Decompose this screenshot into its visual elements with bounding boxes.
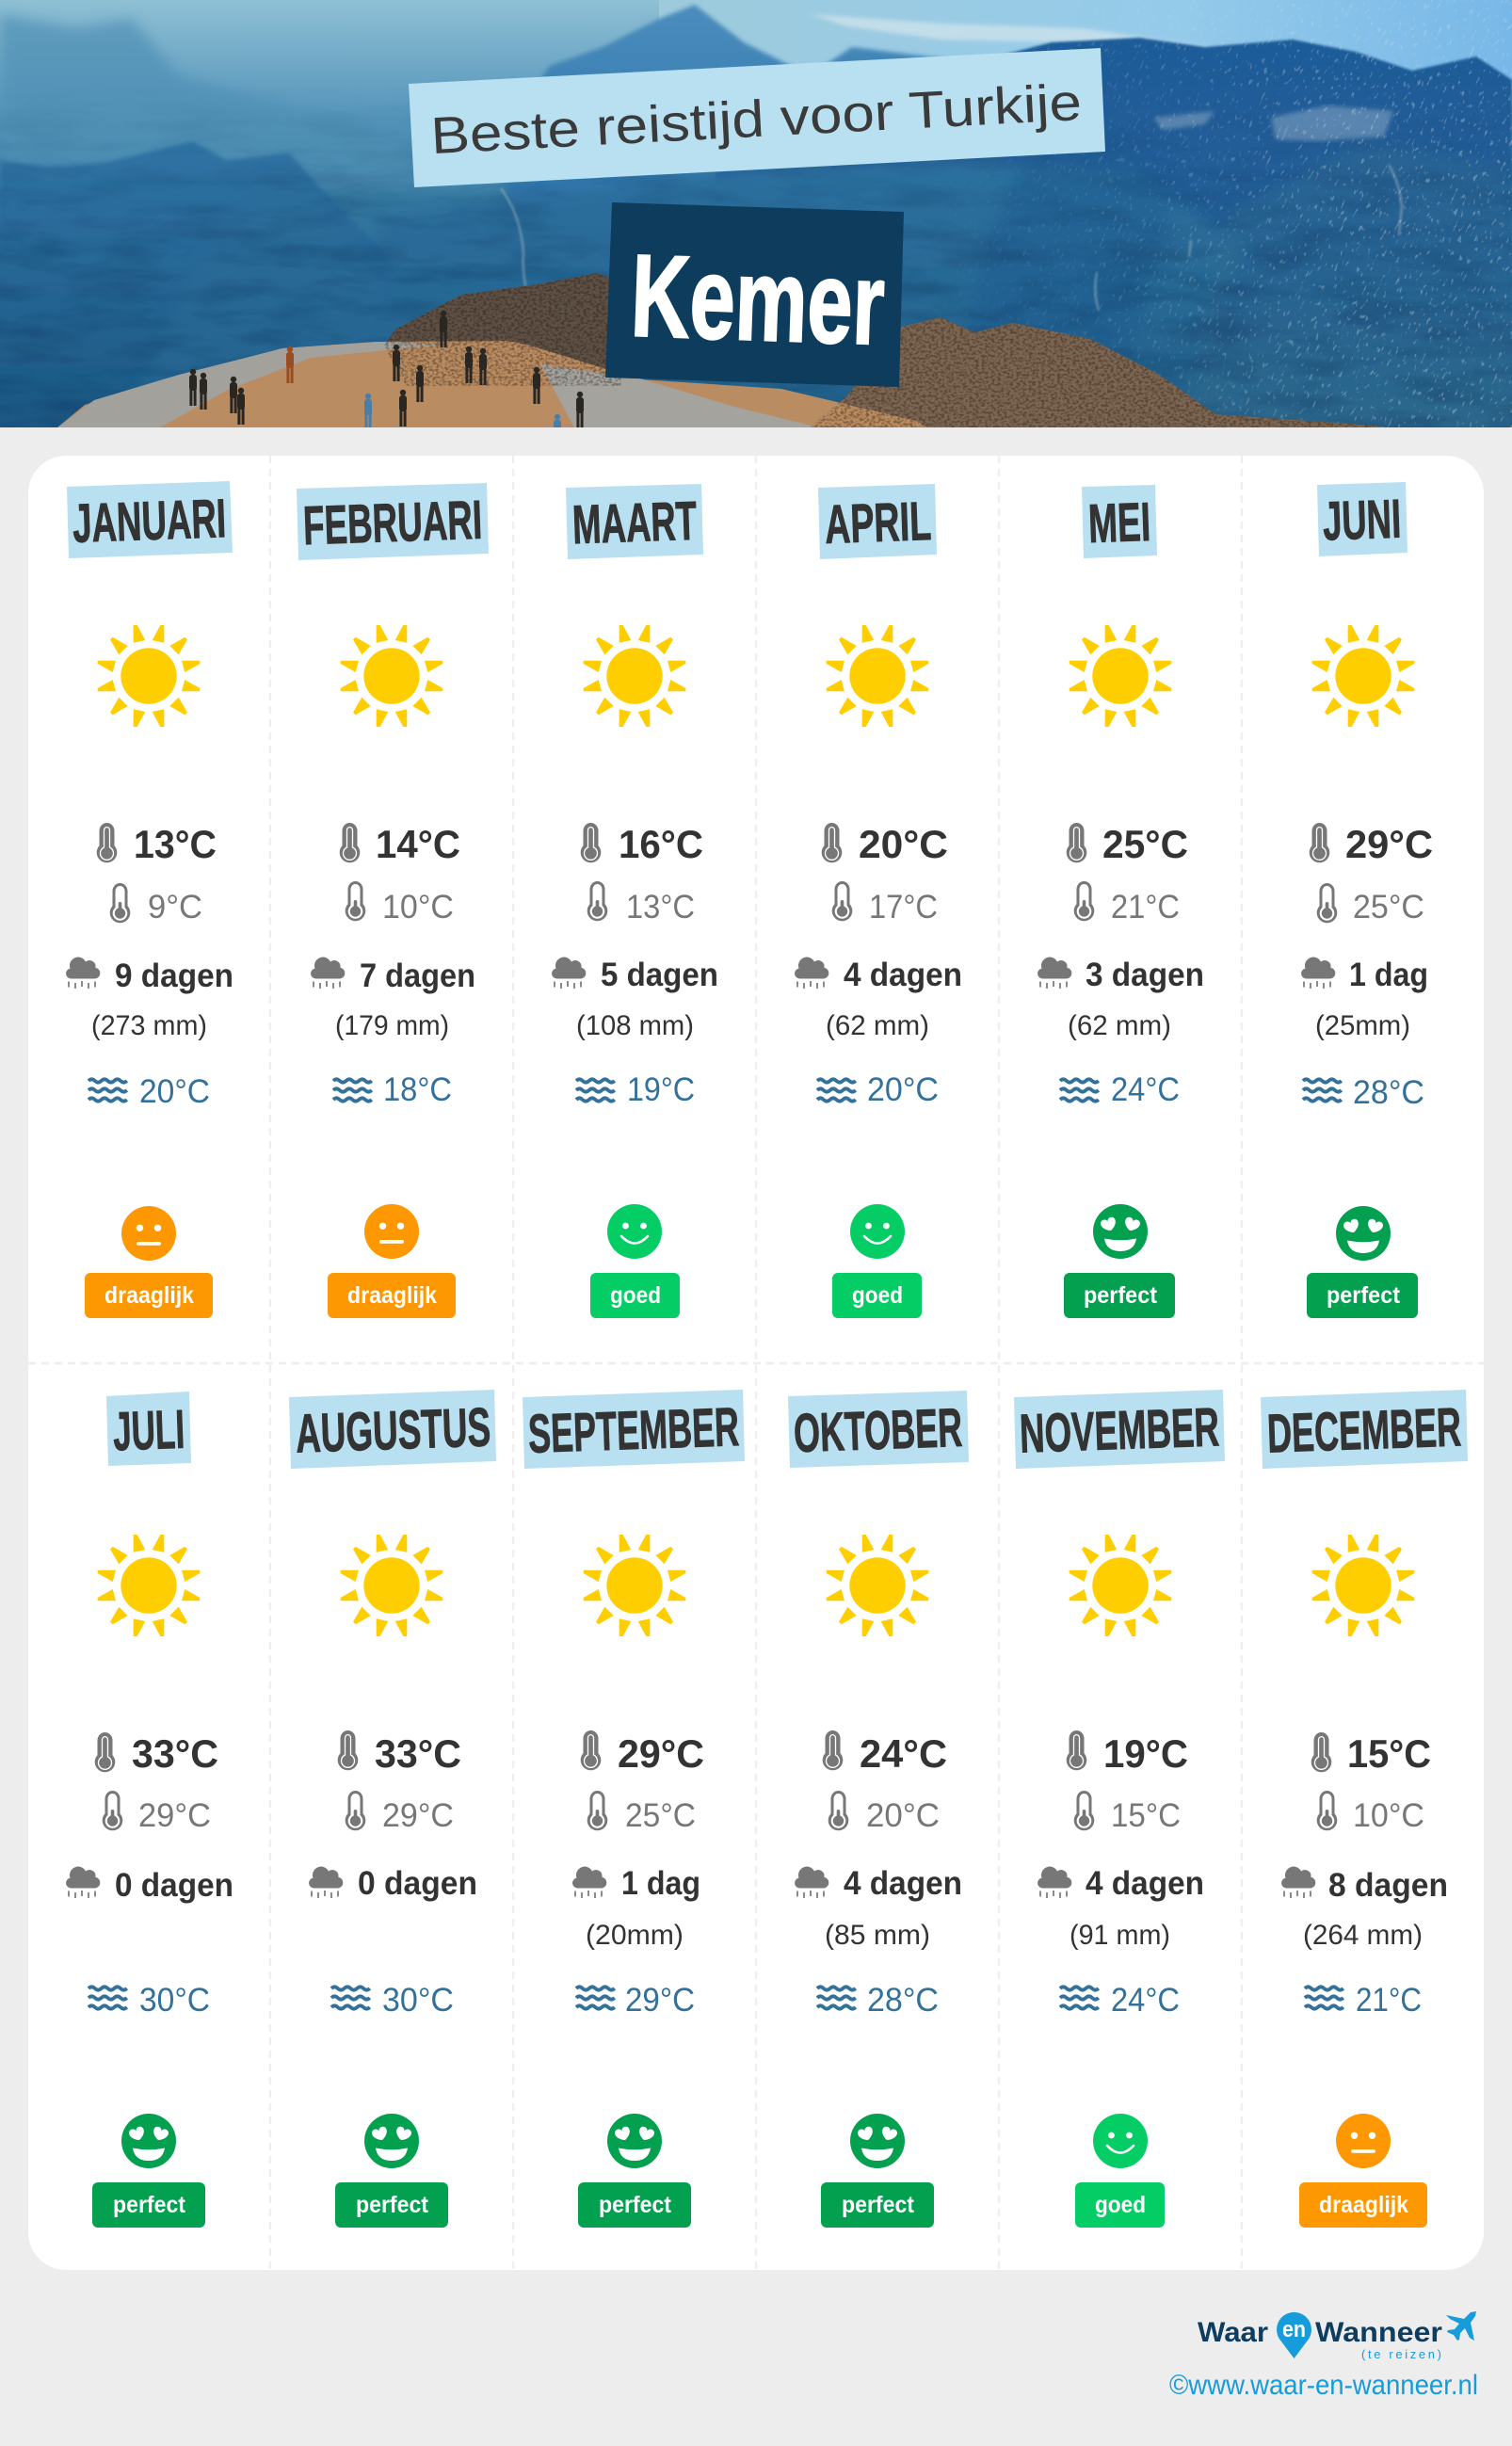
min temperature: 17°C <box>869 889 938 925</box>
rating face <box>1093 1204 1148 1259</box>
rating badge: perfect <box>356 2192 429 2218</box>
rating badge: perfect <box>1327 1282 1401 1309</box>
month: april: APRIL <box>824 491 932 555</box>
max temperature <box>95 1731 218 1776</box>
rating badge: draaglijk <box>105 1282 194 1309</box>
rainfall: (273 mm) <box>91 1010 207 1041</box>
max temperature <box>1067 822 1188 866</box>
max temperature: 29°C <box>618 1731 704 1776</box>
rain days <box>795 1865 962 1902</box>
rating badge: draaglijk <box>1319 2192 1408 2218</box>
rain days <box>66 1867 233 1904</box>
rating face <box>1093 2114 1148 2168</box>
month: oktober <box>788 1391 969 1468</box>
sea temperature: 24°C <box>1111 1982 1180 2019</box>
sea temperature: 28°C <box>1353 1074 1424 1111</box>
rain days: 3 dagen <box>1086 957 1204 993</box>
max temperature <box>581 822 703 866</box>
sea temperature <box>331 1982 454 2019</box>
sea temperature <box>1305 1982 1422 2019</box>
sea temperature <box>817 1071 939 1108</box>
max temperature: 14°C <box>376 822 460 866</box>
sea temperature <box>333 1071 452 1108</box>
month: maart: MAART <box>571 491 698 555</box>
icon: sun <box>827 625 928 727</box>
sea temperature <box>88 1982 210 2019</box>
location banner: Kemer: Kemer <box>629 231 887 370</box>
rating badge <box>590 1273 680 1318</box>
max temperature <box>581 1730 704 1776</box>
sea temperature: 20°C <box>867 1071 939 1108</box>
month: november: NOVEMBER <box>1019 1396 1220 1465</box>
sea temperature: 18°C <box>383 1071 452 1108</box>
rating face <box>850 1204 905 1259</box>
min temperature: 25°C <box>1353 889 1424 925</box>
rating badge <box>1075 2182 1165 2228</box>
sea temperature: 28°C <box>867 1982 939 2019</box>
month: februari: FEBRUARI <box>302 490 483 556</box>
min temperature: 10°C <box>1353 1797 1424 1834</box>
sea temperature <box>576 1982 695 2019</box>
panel: september <box>523 1390 745 2228</box>
rating face <box>850 2114 905 2168</box>
month: augustus <box>289 1390 496 1469</box>
rainfall: (20mm) <box>586 1920 684 1951</box>
month: april <box>818 484 937 559</box>
rainfall: (179 mm) <box>335 1010 449 1041</box>
month: juli: JULI <box>112 1399 185 1462</box>
max temperature <box>823 1730 947 1776</box>
max temperature <box>97 822 217 866</box>
icon: sun <box>341 1535 442 1636</box>
min temperature: 25°C <box>625 1797 696 1834</box>
logo: Waar en Wanneer: (te reizen) <box>1361 2347 1441 2361</box>
rating badge: perfect <box>1084 1282 1158 1309</box>
rating badge: perfect <box>599 2192 672 2218</box>
panel: mei <box>1037 485 1204 1318</box>
rain days: 4 dagen <box>1086 1865 1204 1902</box>
month: mei: MEI <box>1087 491 1151 555</box>
min temperature: 15°C <box>1111 1797 1181 1834</box>
min temperature: 29°C <box>382 1797 454 1834</box>
rating face <box>1336 2114 1391 2168</box>
rain days: 4 dagen <box>844 1865 962 1902</box>
location banner: Kemer <box>605 202 904 387</box>
icon: sun <box>98 1535 200 1636</box>
min temperature <box>832 881 938 925</box>
min temperature <box>1317 883 1424 925</box>
icon: sun <box>1070 1535 1171 1636</box>
sea temperature <box>576 1071 695 1108</box>
min temperature <box>1074 1791 1181 1834</box>
rain days: 9 dagen <box>115 957 233 994</box>
month: september <box>523 1390 745 1469</box>
month: juni <box>1317 482 1407 556</box>
rain days: 5 dagen <box>601 957 718 993</box>
month: januari: JANUARI <box>72 488 227 555</box>
min temperature: 9°C <box>148 889 202 925</box>
rain days: 8 dagen <box>1328 1867 1448 1904</box>
header photo: mountain landscape <box>0 0 1512 427</box>
rain days <box>1301 957 1428 993</box>
sea temperature <box>1303 1074 1424 1111</box>
icon: sun <box>1312 1535 1414 1636</box>
rating badge <box>832 1273 922 1318</box>
icon: map pin <box>1277 2312 1311 2358</box>
panel: februari <box>297 483 489 1318</box>
rainfall: (264 mm) <box>1303 1920 1423 1951</box>
rating badge <box>1064 1273 1175 1318</box>
rating badge <box>1307 1273 1418 1318</box>
logo: Waar en Wanneer: en <box>1282 2317 1306 2342</box>
rain days <box>311 957 475 994</box>
min temperature <box>103 1791 211 1834</box>
icon: sun <box>584 625 685 727</box>
rating badge: perfect <box>113 2192 186 2218</box>
rain days: 7 dagen <box>360 957 475 994</box>
logo: Waar en Wanneer <box>1198 2311 1476 2361</box>
rainfall: (62 mm) <box>1068 1010 1171 1041</box>
rating badge <box>1299 2182 1427 2228</box>
max temperature <box>1067 1730 1188 1776</box>
website url: ©www.waar-en-wanneer.nl <box>1169 2370 1478 2401</box>
min temperature <box>1317 1791 1424 1834</box>
sea temperature <box>1060 1071 1180 1108</box>
min temperature <box>346 881 454 925</box>
panel: juni <box>1301 482 1433 1318</box>
rating badge: goed <box>1095 2192 1146 2218</box>
max temperature: 19°C <box>1103 1731 1188 1776</box>
rain days: 1 dag <box>1349 957 1428 993</box>
title banner <box>409 48 1105 187</box>
rain days <box>66 957 233 994</box>
rain days <box>1037 957 1204 993</box>
rain days <box>309 1865 477 1902</box>
panel: november <box>1014 1390 1225 2228</box>
rain days: 0 dagen <box>115 1867 233 1904</box>
max temperature: 33°C <box>132 1731 218 1776</box>
panel: december <box>1261 1390 1468 2228</box>
min temperature: 29°C <box>138 1797 211 1834</box>
rainfall: (91 mm) <box>1070 1920 1170 1951</box>
min temperature <box>587 1791 696 1834</box>
month: mei <box>1082 485 1157 558</box>
icon: sun <box>827 1535 928 1636</box>
rating face <box>607 1204 662 1259</box>
sea temperature: 29°C <box>625 1982 695 2019</box>
min temperature: 20°C <box>866 1797 940 1834</box>
sea temperature <box>88 1073 210 1110</box>
max temperature: 33°C <box>375 1731 461 1776</box>
sea temperature: 30°C <box>139 1982 210 2019</box>
foreground rock <box>387 273 609 369</box>
rain days: 1 dag <box>621 1865 700 1902</box>
max temperature: 24°C <box>860 1731 947 1776</box>
panel: augustus <box>289 1390 496 2228</box>
min temperature <box>587 881 695 925</box>
max temperature <box>1311 1731 1431 1776</box>
rainfall: (85 mm) <box>825 1920 930 1951</box>
max temperature: 25°C <box>1102 822 1188 866</box>
panel: juli <box>66 1392 233 2228</box>
min temperature: 13°C <box>626 889 695 925</box>
rating face <box>1336 1206 1391 1261</box>
rain days: 0 dagen <box>358 1865 477 1902</box>
min temperature: 21°C <box>1111 889 1180 925</box>
min temperature <box>828 1791 940 1834</box>
people on the terrace <box>189 311 584 427</box>
max temperature: 29°C <box>1345 822 1433 866</box>
rating face <box>607 2114 662 2168</box>
panel: oktober <box>788 1391 969 2228</box>
rating badge: draaglijk <box>347 1282 437 1309</box>
sea temperature: 24°C <box>1111 1071 1180 1108</box>
month: februari <box>297 483 489 560</box>
min temperature <box>110 883 202 925</box>
rain days <box>1281 1867 1448 1904</box>
sea temperature <box>1060 1982 1180 2019</box>
max temperature <box>338 1730 461 1776</box>
month: augustus: AUGUSTUS <box>295 1396 491 1465</box>
min temperature: 10°C <box>382 889 454 925</box>
rating face <box>121 2114 176 2168</box>
rating badge <box>821 2182 934 2228</box>
month: juni: JUNI <box>1322 489 1402 552</box>
panel: april <box>795 484 962 1318</box>
sea temperature <box>817 1982 939 2019</box>
rating badge <box>578 2182 691 2228</box>
rating face <box>364 2114 419 2168</box>
rating badge <box>85 1273 213 1318</box>
month: juli <box>106 1392 191 1466</box>
rain days <box>552 957 718 993</box>
min temperature <box>346 1791 454 1834</box>
rainfall: (108 mm) <box>576 1010 694 1041</box>
rainfall: (62 mm) <box>826 1010 929 1041</box>
rating badge <box>92 2182 205 2228</box>
rainfall: (25mm) <box>1315 1010 1410 1041</box>
rating badge: goed <box>852 1282 903 1309</box>
rating badge: goed <box>610 1282 661 1309</box>
rating face <box>121 1206 176 1261</box>
panel: januari <box>66 481 233 1318</box>
sea temperature: 20°C <box>139 1073 210 1110</box>
month: september: SEPTEMBER <box>527 1396 740 1465</box>
sea temperature: 30°C <box>382 1982 454 2019</box>
month: oktober: OKTOBER <box>793 1397 963 1464</box>
rain days <box>795 957 962 993</box>
max temperature: 16°C <box>619 822 703 866</box>
max temperature: 15°C <box>1347 1731 1431 1776</box>
panel: maart <box>552 484 718 1318</box>
rating badge: perfect <box>842 2192 915 2218</box>
icon: sun <box>584 1535 685 1636</box>
icon: sun <box>341 625 442 727</box>
logo: Waar en Wanneer: Wanneer <box>1315 2317 1442 2348</box>
rating face <box>364 1204 419 1259</box>
rating badge <box>328 1273 456 1318</box>
panel: climate card <box>28 456 1484 2270</box>
rain days <box>572 1865 700 1902</box>
rain days: 4 dagen <box>844 957 962 993</box>
month: januari <box>67 481 233 558</box>
rating badge <box>335 2182 448 2228</box>
rain days <box>1037 1865 1204 1902</box>
logo: Waar en Wanneer: Waar <box>1198 2317 1268 2348</box>
min temperature <box>1074 881 1180 925</box>
title banner: Beste reistijd voor Turkije <box>429 72 1083 165</box>
icon: sun <box>98 625 200 727</box>
max temperature: 20°C <box>859 822 948 866</box>
sea temperature: 21°C <box>1356 1982 1422 2019</box>
icon: airplane <box>1446 2311 1476 2341</box>
max temperature <box>822 822 948 866</box>
max temperature <box>340 822 460 866</box>
icon: sun <box>1070 625 1171 727</box>
max temperature: 13°C <box>134 822 217 866</box>
month: november <box>1014 1390 1225 1469</box>
icon: sun <box>1312 625 1414 727</box>
month: maart <box>566 484 703 559</box>
sea temperature: 19°C <box>627 1071 695 1108</box>
